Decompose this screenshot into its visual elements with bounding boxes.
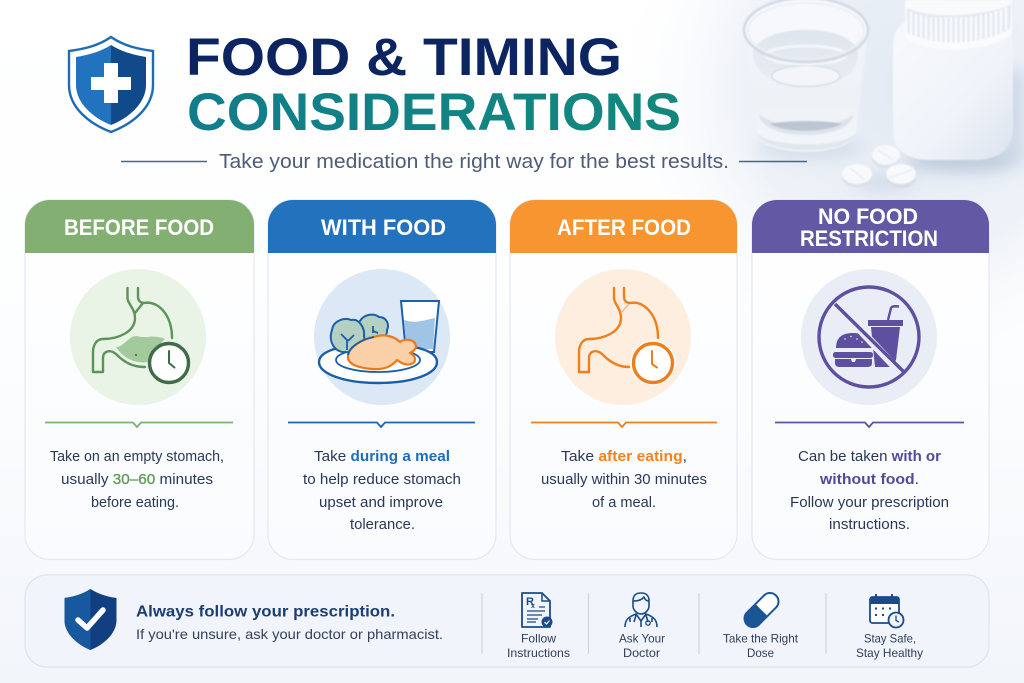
item: ask your doctor xyxy=(619,593,665,660)
footer message: If you're unsure, ask your doctor or pharmacist. xyxy=(136,626,443,642)
header: with food xyxy=(268,200,496,253)
item: take the right dose: Take the Right xyxy=(723,632,799,646)
glass xyxy=(744,0,868,152)
icon: plate of food with water xyxy=(314,269,450,405)
item: stay safe, stay healthy: Stay Safe, xyxy=(864,632,916,646)
panel: with food xyxy=(268,200,496,560)
text: no food restriction: Can be taken with or xyxy=(798,448,941,465)
icon: shield with check xyxy=(64,589,116,650)
text: after food: of a meal. xyxy=(592,494,656,511)
bottle xyxy=(893,0,1013,160)
item: ask your doctor: Ask Your xyxy=(619,632,665,646)
text: with food: tolerance. xyxy=(350,516,415,533)
header: after food xyxy=(510,200,737,253)
item: take the right dose: Dose xyxy=(747,646,774,660)
text: before food: before eating. xyxy=(91,494,179,511)
text: before food xyxy=(50,448,224,511)
text: no food restriction xyxy=(790,448,949,533)
photo: glass of water, pill bottle and tablets xyxy=(744,0,1024,190)
logo: medical shield xyxy=(69,37,153,132)
header: after food: AFTER FOOD xyxy=(557,215,691,240)
tablets xyxy=(842,145,916,188)
header: before food: BEFORE FOOD xyxy=(64,215,214,240)
divider arrow xyxy=(531,422,717,427)
header: before food xyxy=(25,200,254,253)
text: with food xyxy=(303,448,461,533)
title: FOOD & TIMING xyxy=(186,28,622,87)
icon: stomach with liquid and clock xyxy=(70,269,206,405)
footer panel xyxy=(25,575,989,667)
item: ask your doctor: Doctor xyxy=(623,646,660,660)
divider arrow xyxy=(45,422,233,427)
panel: before food xyxy=(25,200,254,560)
item: follow instructions: Instructions xyxy=(507,646,570,660)
text: no food restriction: Follow your prescription xyxy=(790,494,949,511)
text: after food xyxy=(541,448,707,511)
divider arrow xyxy=(288,422,475,427)
item: take the right dose xyxy=(723,589,799,660)
text: with food: upset and improve xyxy=(319,494,443,511)
text: before food: Take on an empty stomach, xyxy=(50,448,224,465)
subtitle with rules: Take your medication the right way for the best results. xyxy=(219,151,729,173)
item: follow instructions: x xyxy=(531,603,535,610)
icon: stomach with clock xyxy=(555,269,691,405)
header: no food restriction: NO FOOD xyxy=(818,204,918,229)
item: follow instructions: Follow xyxy=(521,632,556,646)
item: stay safe, stay healthy: Stay Healthy xyxy=(856,646,923,660)
icon: no burger and drink xyxy=(801,269,937,405)
item: stay safe, stay healthy xyxy=(856,594,923,660)
panel: no food restriction xyxy=(752,200,989,560)
footer message: Always follow your prescription. xyxy=(136,604,395,620)
text: after food: usually within 30 minutes xyxy=(541,471,707,488)
title: CONSIDERATIONS xyxy=(187,83,681,142)
header: no food restriction xyxy=(752,200,989,253)
shadows xyxy=(756,70,1024,190)
text: with food: to help reduce stomach xyxy=(303,471,461,488)
footer message xyxy=(136,604,443,642)
item: follow instructions xyxy=(507,593,570,660)
text: before food: usually 30–60 minutes xyxy=(61,471,213,488)
divider arrow xyxy=(775,422,964,427)
title xyxy=(186,28,681,142)
header: with food: WITH FOOD xyxy=(321,215,446,240)
text: after food: Take after eating, xyxy=(561,448,687,465)
header: no food restriction: RESTRICTION xyxy=(800,226,938,251)
text: no food restriction: without food . xyxy=(819,471,919,488)
text: with food: Take during a meal xyxy=(314,448,450,465)
panel: after food xyxy=(510,200,737,560)
item: follow instructions: R xyxy=(526,596,534,608)
text: no food restriction: instructions. xyxy=(829,516,910,533)
